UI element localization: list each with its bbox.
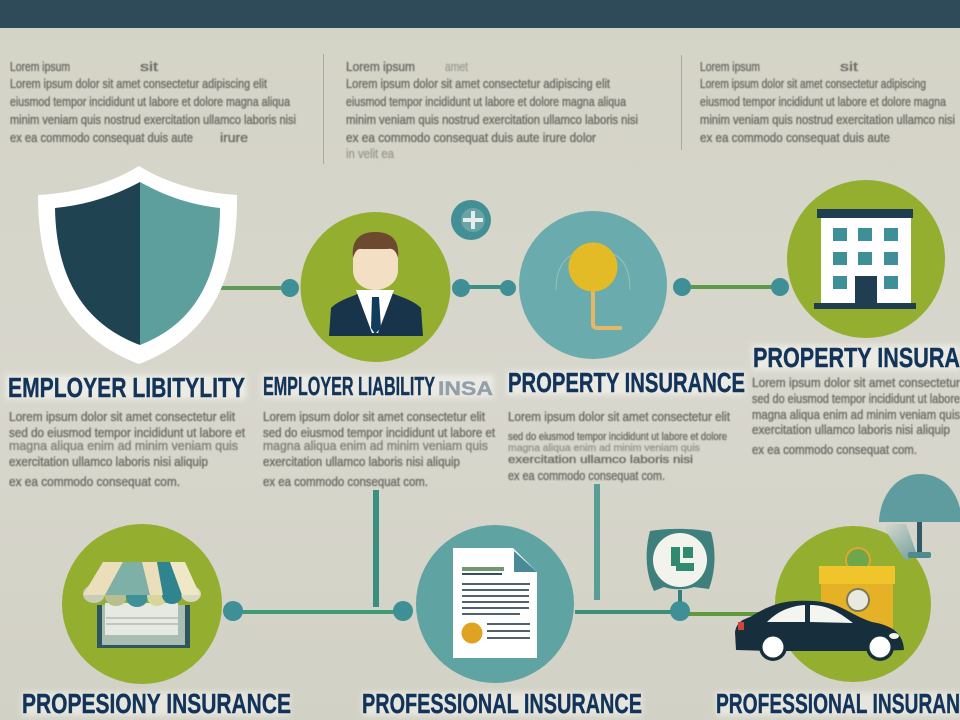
divider 2 [681, 55, 682, 150]
header bar [0, 0, 960, 28]
text block: top left: Lorem ipsum [10, 59, 70, 74]
text block: property middle: ex ea commodo consequat com. [508, 468, 665, 483]
text block: top left: sit [140, 59, 159, 74]
text block: property middle: exercitation ullamco laboris nisi [508, 454, 693, 466]
text block: top left: ex ea commodo consequat duis aute [10, 130, 193, 145]
text block: property middle [508, 409, 730, 483]
heading: employer liability middle: INSA [438, 379, 493, 400]
heading: employer liability middle: EMPLOYER LIABILITY [263, 371, 435, 401]
divider 1 [323, 54, 324, 164]
icon: plus badge [451, 200, 491, 240]
text block: top left: irure [220, 130, 248, 145]
heading: property insurance middle: PROPERTY INSURANCE [508, 367, 745, 398]
text block: top right [700, 59, 955, 145]
text block: employer left: sed do eiusmod tempor incididunt ut labore et [9, 425, 245, 440]
icon: employer person [300, 212, 450, 362]
text block: property right [752, 375, 960, 457]
icon: briefcase [775, 526, 931, 682]
text block: employer left: ex ea commodo consequat com. [9, 474, 180, 489]
icon: document [416, 525, 574, 683]
icon: shield [38, 166, 237, 364]
text block: property middle: sed do eiusmod tempor incididunt ut labore et dolore [508, 431, 727, 443]
text block: employer middle: Lorem ipsum dolor sit amet consectetur elit [263, 409, 485, 424]
text block: property right: ex ea commodo consequat com. [752, 442, 917, 457]
text block: top middle: amet [445, 59, 468, 74]
text block: top left [10, 59, 296, 145]
text block: employer middle: exercitation ullamco laboris nisi aliquip [263, 454, 460, 469]
text block: employer middle: sed do eiusmod tempor incididunt ut labore et [263, 425, 495, 440]
text block: property middle: magna aliqua enim ad minim veniam quis [508, 443, 700, 454]
connector lines [218, 285, 780, 616]
text block: property middle: Lorem ipsum dolor sit amet consectetur elit [508, 409, 730, 424]
icon: building [787, 180, 945, 338]
text block: employer middle [263, 409, 495, 489]
text block: top middle [346, 59, 638, 161]
text block: top right: sit [840, 59, 859, 74]
text block: top middle: ex ea commodo consequat duis aute irure dolor [346, 130, 597, 145]
text block: top middle: in velit ea [346, 146, 395, 161]
text block: top right: Lorem ipsum [700, 59, 760, 74]
icon: umbrella [879, 474, 960, 561]
text block: top left: eiusmod tempor incididunt ut labore et dolore magna aliqua [10, 94, 291, 109]
text block: top right: ex ea commodo consequat duis aute [700, 130, 890, 145]
icon: badge [647, 529, 715, 591]
text block: top middle: Lorem ipsum [346, 59, 415, 74]
heading: bottom middle: PROFESSIONAL INSURANCE [362, 688, 642, 719]
text block: employer left [9, 409, 245, 489]
text block: employer left: exercitation ullamco laboris nisi aliquip [9, 454, 208, 469]
text block: top middle: Lorem ipsum dolor sit amet consectetur adipiscing elit [346, 76, 610, 91]
connector nodes [223, 278, 789, 621]
text block: employer left: Lorem ipsum dolor sit amet consectetur elit [9, 409, 235, 424]
text block: top middle: minim veniam quis nostrud exercitation ullamco laboris nisi [346, 112, 638, 127]
heading: employer liability left: EMPLOYER LIBITYLITY [8, 372, 245, 403]
icon: property bulb [519, 211, 667, 359]
text block: top left: minim veniam quis nostrud exercitation ullamco laboris nisi [10, 112, 296, 127]
text block: employer left: magna aliqua enim ad minim veniam quis [9, 438, 238, 453]
icon: shop [62, 524, 222, 684]
heading: bottom left: PROPESIONY INSURANCE [22, 688, 291, 719]
text block: employer middle: ex ea commodo consequat com. [263, 474, 428, 489]
icon: car [735, 601, 904, 661]
text block: top left: Lorem ipsum dolor sit amet consectetur adipiscing elit [10, 76, 267, 91]
text block: top middle: eiusmod tempor incididunt ut labore et dolore magna aliqua [346, 94, 627, 109]
text block: employer middle: magna aliqua enim ad minim veniam quis [263, 438, 488, 453]
